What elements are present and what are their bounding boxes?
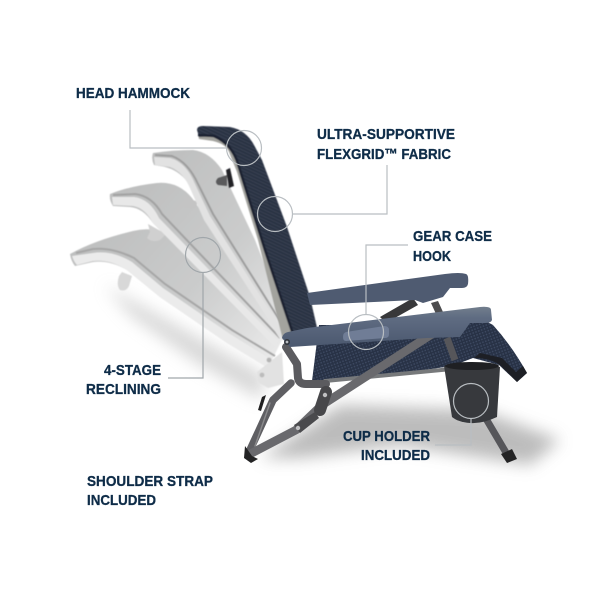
headrest peg: [216, 168, 234, 188]
ghost backrest 2: [110, 183, 288, 347]
callout: cup holder leader: [435, 384, 488, 445]
callout: head hammock leader: [130, 110, 262, 166]
rear leg upper section: [447, 338, 455, 360]
label: head hammock: HEAD HAMMOCK: [76, 85, 190, 102]
callout: reclining leader: [168, 238, 220, 378]
main backrest: [197, 126, 318, 340]
reclined ghost backrest positions: [70, 150, 292, 388]
label: gear case hook: GEAR CASE: [413, 228, 492, 245]
frame details: [244, 393, 327, 463]
frame bar: [325, 369, 452, 381]
label: fabric: [317, 126, 455, 163]
seat edge: [474, 353, 527, 382]
backrest frame: [198, 133, 295, 340]
gear case hook: [343, 326, 389, 341]
backrest mesh: [197, 126, 318, 337]
label: shoulder strap: INCLUDED: [87, 492, 156, 509]
rear leg: [447, 335, 508, 456]
label: fabric: ULTRA-SUPPORTIVE: [317, 126, 455, 143]
near armrest: [282, 307, 492, 347]
main diagonal strut: [252, 334, 432, 453]
label: reclining: [86, 362, 161, 398]
cup holder: [444, 362, 500, 423]
rear foot: [501, 449, 517, 463]
seat mesh: [312, 318, 527, 382]
callout: gear case leader: [348, 245, 408, 350]
label: cup holder: [343, 428, 430, 464]
label: gear case hook: [413, 228, 492, 265]
ghost backrest 1: [152, 150, 292, 339]
back leg: [250, 383, 291, 450]
label: shoulder strap: [87, 473, 213, 509]
label: reclining: RECLINING: [86, 381, 161, 398]
label: shoulder strap: SHOULDER STRAP: [87, 473, 213, 490]
ghost hinge hardware: [257, 352, 284, 388]
front support tube: [286, 347, 326, 384]
callout: fabric leader: [258, 165, 387, 232]
lower frame: [250, 334, 452, 453]
far armrest support and tubes: [380, 298, 443, 323]
label: cup holder: CUP HOLDER: [343, 428, 430, 445]
pivot link: [320, 392, 326, 410]
label: reclining: 4-STAGE: [104, 362, 161, 379]
label: fabric: FLEXGRID™ FABRIC: [317, 146, 451, 163]
ground shadows: [105, 285, 560, 465]
label: gear case hook: HOOK: [413, 248, 451, 265]
far armrest: [307, 273, 468, 305]
ghost backrest 3: [70, 229, 282, 368]
label: cup holder: INCLUDED: [361, 447, 430, 464]
